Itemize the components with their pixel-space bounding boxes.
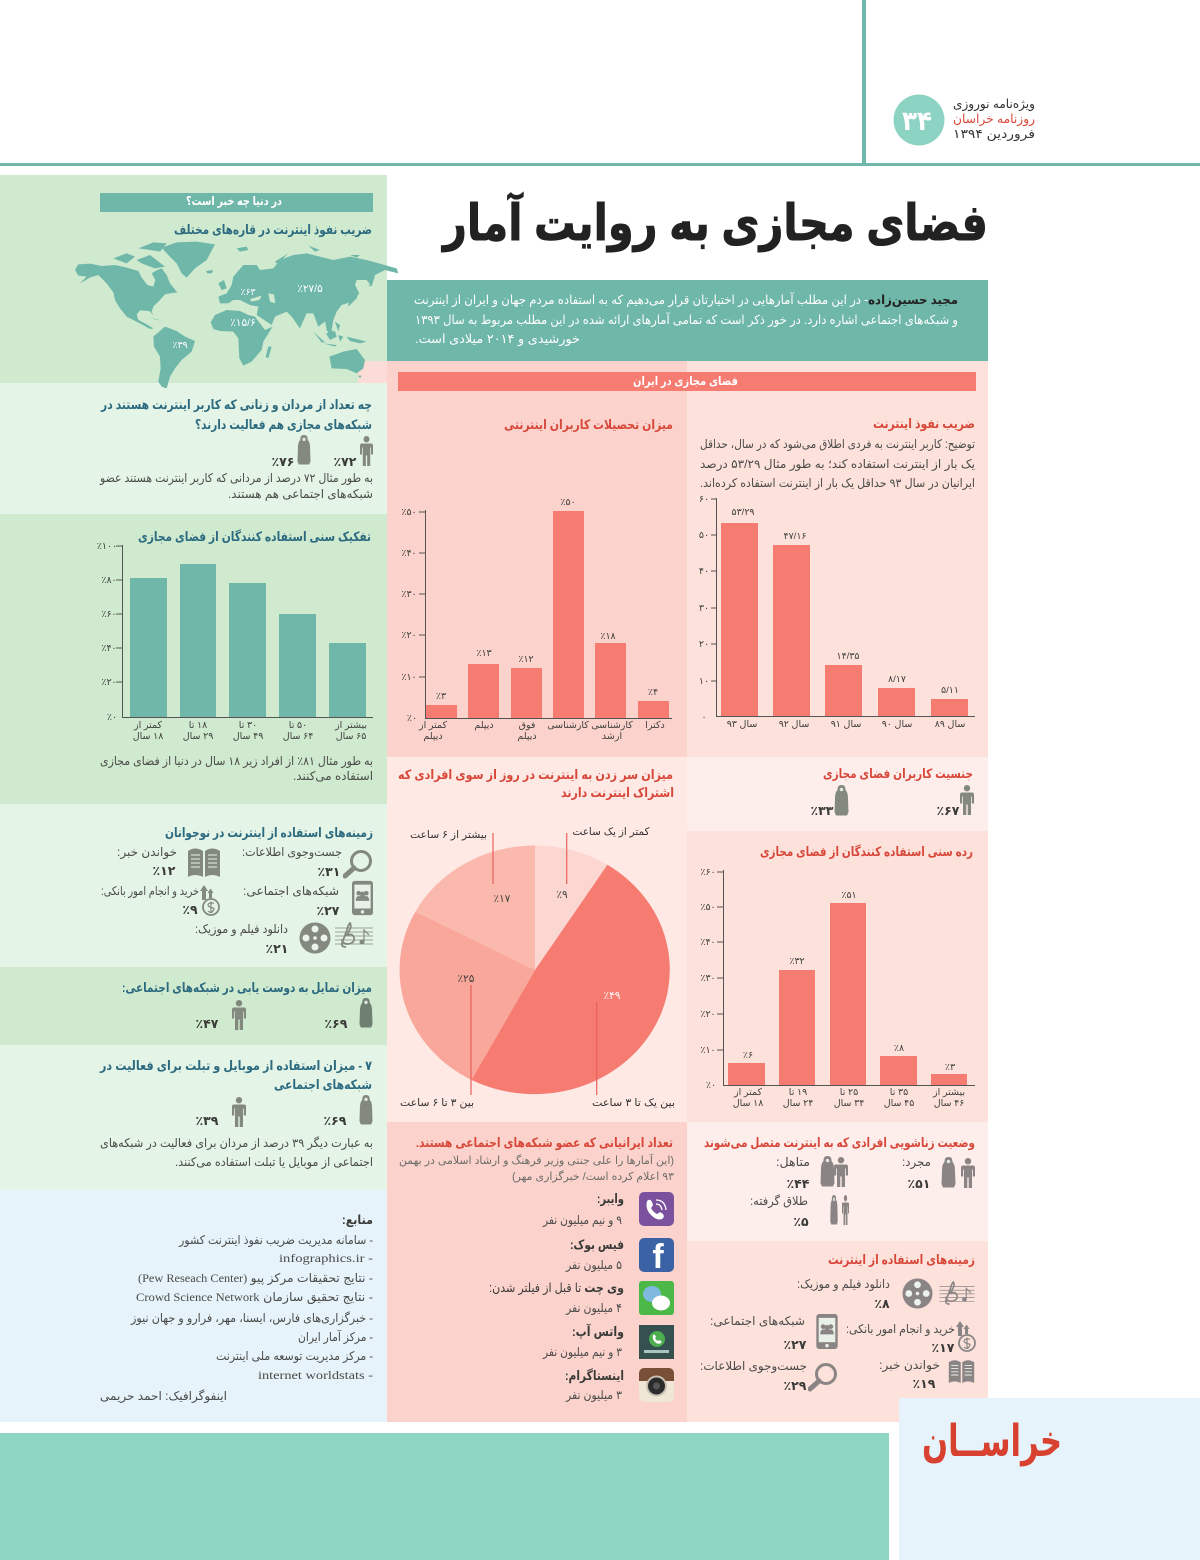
bar chart: age rank: ۴۶ سال	[934, 1098, 964, 1109]
bar chart: penetration by year: ۲۰	[699, 639, 709, 650]
bar chart: age rank: ٪۵۰	[700, 902, 716, 913]
bar chart: age rank: ۱۹ تا	[789, 1087, 807, 1098]
age breakdown note: به طور مثال ۸۱٪ از افراد زیر ۱۸ سال در دنیا از فضای مجازی	[100, 754, 373, 769]
bar chart: education: ارشد	[602, 731, 622, 742]
panel: marital status: ٪۵۱	[908, 1177, 930, 1191]
panel: men and women on social networks: شبکه‌های مجازی هم فعالیت دارند؟	[195, 417, 372, 432]
bar chart: penetration by year: ۶۰	[699, 494, 709, 505]
world map: ٪۶۳	[240, 287, 256, 298]
pie chart: daily use: بین ۳ تا ۶ ساعت	[400, 1097, 474, 1109]
panel: men and women on social networks	[99, 397, 373, 501]
panel: making friends: ٪۶۹	[325, 1017, 348, 1031]
bar chart: age breakdown: ٪۴۰	[101, 643, 117, 654]
wechat row: ۴ میلیون نفر	[565, 1301, 622, 1316]
bar chart: age rank: ٪۳۲	[789, 956, 805, 967]
panel: marital status: ٪۵	[793, 1215, 809, 1229]
bar chart: penetration by year: ۴۰	[699, 566, 709, 577]
bar chart: age breakdown: ٪۱۰۰	[97, 541, 117, 552]
bar chart: penetration by year: ۵۰	[699, 530, 709, 541]
world map: ٪۲۷/۵	[297, 283, 323, 295]
bar chart: education: ٪۳	[436, 691, 446, 702]
panel: internet use areas	[700, 1252, 975, 1393]
top rules	[0, 0, 1200, 166]
instagram row: ۳ میلیون نفر	[565, 1388, 622, 1403]
bar chart: penetration by year: ۴۷/۱۶	[783, 531, 807, 542]
bar chart: age rank: ٪۳۰	[700, 973, 716, 984]
panel: mobile use: اجتماعی از موبایل یا تبلت استفاده می‌کنند.	[175, 1155, 373, 1170]
heading: daily use: اشتراک اینترنت دارند	[561, 785, 674, 800]
bar chart: age rank: ٪۸	[894, 1043, 904, 1054]
title: فضای مجازی به روایت آمار	[441, 192, 988, 253]
instagram row	[565, 1368, 674, 1403]
bar chart: age breakdown: ۱۸ سال	[133, 731, 163, 742]
panel: social network members	[399, 1135, 674, 1183]
heading bar: world: در دنیا چه خبر است؟	[186, 194, 282, 208]
panel: mobile use: به عبارت دیگر ۳۹ درصد از مردان برای فعالیت در شبکه‌های	[100, 1136, 373, 1151]
panel: making friends: ٪۴۷	[196, 1017, 219, 1031]
panel: marital status: مجرد:	[902, 1155, 931, 1170]
facebook row: فیس بوک:	[570, 1237, 624, 1252]
pie chart: daily use: بیشتر از ۶ ساعت	[410, 829, 487, 841]
wechat row	[489, 1281, 674, 1316]
sources: اینفوگرافیک: احمد حریمی	[100, 1389, 227, 1404]
bar chart: age rank: ٪۰	[706, 1080, 716, 1091]
header: issue badge: فروردین ۱۳۹۴	[953, 127, 1035, 142]
bar chart: age breakdown: ٪۲۰	[101, 677, 117, 688]
bar chart: education	[401, 497, 672, 742]
bar chart: age breakdown: بیشتر از	[334, 720, 367, 731]
panel: teen use: زمینه‌های استفاده از اینترنت در نوجوانان	[165, 825, 373, 840]
panel: marital status	[704, 1135, 975, 1229]
bar chart: age breakdown: ۶۵ سال	[336, 731, 366, 742]
intro panel: مجید حسین‌زاده- در این مطلب آمارهایی در اختیارتان قرار می‌دهیم که به استفاده مردم جهان و ایران از اینترنت	[414, 292, 958, 308]
panel: penetration rate	[700, 416, 975, 491]
panel: penetration rate: توضیح: کاربر اینترنت به فردی اطلاق می‌شود که در سال، حداقل	[700, 437, 975, 452]
viber row: ۹ و نیم میلیون نفر	[542, 1213, 622, 1228]
panel: teen use: ٪۹	[182, 903, 198, 917]
panel: men and women on social networks: ٪۷۲	[334, 455, 357, 469]
panel: penetration rate: ایرانیان در سال ۹۳ حداقل یک بار از اینترنت استفاده کرده‌اند.	[700, 476, 975, 491]
bar chart: age breakdown: ۱۸ تا	[189, 720, 207, 731]
sources: - سامانه مدیریت ضریب نفوذ اینترنت کشور	[178, 1233, 373, 1248]
sources: - نتایج تحقیق سازمان Crowd Science Network	[136, 1290, 373, 1305]
panel: internet use areas: ٪۲۹	[784, 1379, 807, 1393]
bar chart: age rank: ٪۳	[945, 1062, 955, 1073]
panel: gender	[811, 766, 974, 818]
sources: - internet worldstats	[258, 1368, 373, 1382]
pie chart: daily use: کمتر از یک ساعت	[572, 826, 650, 838]
panel: marital status: متاهل:	[776, 1155, 810, 1169]
bar chart: education: ٪۳۰	[401, 589, 417, 600]
panel: internet use areas: زمینه‌های استفاده از اینترنت	[828, 1252, 975, 1267]
panel: gender: ٪۳۳	[811, 804, 834, 818]
bar chart: age rank: ۳۵ تا	[890, 1087, 908, 1098]
bar chart: age breakdown: ٪۶۰	[101, 609, 117, 620]
panel: penetration rate: ضریب نفوذ اینترنت	[873, 416, 975, 431]
panel: teen use: ٪۲۷	[317, 904, 340, 918]
bar chart: education: ٪۱۲	[518, 654, 534, 665]
bar chart: age breakdown: ٪۸۰	[101, 575, 117, 586]
sources: - خبرگزاری‌های فارس، ایسنا، مهر، فرارو و جهان نیوز	[130, 1311, 373, 1326]
bar chart: penetration by year: ۰	[701, 712, 707, 723]
bar chart: education: کمتر از	[418, 720, 447, 731]
viber row	[542, 1191, 674, 1228]
header: issue badge	[894, 94, 1035, 146]
heading: daily use: میزان سر زدن به اینترنت در روز از سوی افرادی که	[398, 767, 673, 782]
bar chart: penetration by year: سال ۹۰	[882, 719, 912, 730]
pie chart: daily use: بین یک تا ۳ ساعت	[592, 1097, 675, 1109]
bar chart: age breakdown: ۳۰ تا	[239, 720, 257, 731]
intro panel: خورشیدی و ۲۰۱۴ میلادی است.	[415, 332, 580, 347]
panel: penetration rate: یک بار از اینترنت استفاده کند؛ به طور مثال ۵۳/۲۹ درصد	[700, 457, 975, 472]
pie chart: daily use: ٪۴۹	[604, 990, 621, 1002]
panel: internet use areas: ٪۱۷	[932, 1341, 955, 1355]
bar chart: age rank: ٪۵۱	[841, 890, 857, 901]
bar chart: education: ٪۴۰	[401, 548, 417, 559]
panel: making friends	[122, 980, 373, 1031]
logo: Khorasan: خراســان	[922, 1417, 1062, 1467]
bar chart: age rank: کمتر از	[733, 1087, 762, 1098]
header: issue badge: ویژه‌نامه نوروزی	[953, 97, 1035, 112]
bar chart: age breakdown: ۵۰ تا	[289, 720, 307, 731]
bar chart: age rank	[700, 867, 975, 1109]
panel: teen use: ٪۱۲	[153, 864, 176, 878]
panel: marital status: ٪۴۴	[787, 1177, 810, 1191]
bar chart: education: ٪۱۳	[476, 648, 492, 659]
panel: internet use areas: جست‌وجوی اطلاعات:	[700, 1359, 807, 1374]
panel: teen use: جست‌وجوی اطلاعات:	[242, 845, 342, 860]
panel: teen use: شبکه‌های اجتماعی:	[243, 884, 339, 898]
intro panel	[387, 280, 988, 361]
panel: men and women on social networks: چه تعداد از مردان و زنانی که کاربر اینترنت هستند در	[100, 397, 372, 412]
pie chart: daily use: ٪۹	[556, 889, 568, 901]
whatsapp row: ۳ و نیم میلیون نفر	[542, 1345, 622, 1360]
sources	[100, 1213, 373, 1404]
facebook row: ۵ میلیون نفر	[565, 1258, 622, 1273]
panel: marital status: وضعیت زناشویی افرادی که به اینترنت متصل می‌شوند	[704, 1135, 975, 1150]
intro panel: و شبکه‌های اجتماعی اشاره دارد. در خور ذکر است که تمامی آمارهای ارائه شده در این مطلب مربوط به سال ۱۳۹۳	[415, 312, 958, 328]
bar chart: education: ٪۰	[407, 713, 417, 724]
bar chart: penetration by year: ۸/۱۷	[888, 674, 906, 685]
sources: منابع:	[342, 1213, 373, 1227]
heading: age breakdown: تفکیک سنی استفاده کنندگان از فضای مجازی	[138, 529, 371, 544]
bar chart: education: ٪۱۸	[600, 631, 616, 642]
heading: education: میزان تحصیلات کاربران اینترنتی	[504, 417, 673, 432]
bar chart: penetration by year: ۳۰	[699, 603, 709, 614]
bar chart: penetration by year: ۱۴/۳۵	[836, 651, 860, 662]
bar chart: penetration by year	[699, 494, 975, 730]
panel: teen use: ٪۳۱	[318, 865, 340, 879]
panel: gender: ٪۶۷	[937, 804, 960, 818]
heading bar: Iran: فضای مجازی در ایران	[633, 374, 738, 388]
header: issue badge: ۳۴	[902, 106, 932, 136]
world map	[75, 242, 398, 388]
sources: - نتایج تحقیقات مرکز پیو (Pew Reseach Center)	[138, 1271, 373, 1286]
bar chart: penetration by year: سال ۹۲	[779, 719, 809, 730]
sources: - infographics.ir	[279, 1251, 373, 1265]
panel: teen use: دانلود فیلم و موزیک:	[195, 922, 288, 937]
bar chart: penetration by year: ۱۰	[699, 676, 709, 687]
panel: internet use areas: ٪۱۹	[913, 1377, 936, 1391]
bar chart: age rank: ٪۱۰	[700, 1045, 716, 1056]
panel: mobile use	[99, 1058, 373, 1170]
world map: ٪۱۵/۶	[230, 317, 256, 329]
panel: social network members: (این آمارها را علی جنتی وزیر فرهنگ و ارشاد اسلامی در بهمن	[399, 1153, 674, 1167]
panel: internet use areas: خواندن خبر:	[879, 1358, 940, 1373]
panel: teen use: خواندن خبر:	[117, 845, 177, 860]
bar chart: age breakdown: ۶۴ سال	[283, 731, 313, 742]
sources: - مرکز آمار ایران	[298, 1329, 373, 1345]
bar chart: age rank: ۱۸ سال	[733, 1098, 763, 1109]
panel: men and women on social networks: ٪۷۶	[272, 455, 294, 469]
panel: men and women on social networks: به طور مثال ۷۲ درصد از مردانی که کاربر اینترنت هستند عضو	[99, 471, 373, 486]
heading: daily use	[398, 767, 674, 800]
panel: mobile use: ۷ - میزان استفاده از موبایل و تبلت برای فعالیت در	[99, 1058, 372, 1073]
bar chart: age rank: ۳۴ سال	[834, 1098, 864, 1109]
bar chart: age breakdown: ٪۰	[107, 712, 117, 723]
pie chart: daily use: ٪۱۷	[494, 893, 511, 905]
panel: social network members: تعداد ایرانیانی که عضو شبکه‌های اجتماعی هستند.	[416, 1135, 673, 1150]
bar chart: penetration by year: سال ۹۳	[727, 719, 757, 730]
bar chart: education: دیپلم	[423, 731, 443, 742]
panel: men and women on social networks: شبکه‌های اجتماعی هم هستند.	[228, 487, 373, 501]
heading bar: world	[100, 193, 373, 212]
facebook row: f	[652, 1238, 664, 1276]
bar chart: age rank: ٪۴۰	[700, 937, 716, 948]
bar chart: age rank: ٪۲۰	[700, 1009, 716, 1020]
panel: internet use areas: ٪۲۷	[784, 1338, 807, 1352]
bar chart: age breakdown	[97, 541, 373, 742]
pie chart: daily use: ٪۲۵	[458, 973, 475, 985]
bar chart: penetration by year: ۵/۱۱	[941, 685, 959, 696]
panel: marital status: طلاق گرفته:	[750, 1194, 808, 1209]
heading: continents: ضریب نفوذ اینترنت در قاره‌های مختلف	[174, 222, 372, 237]
bar chart: age rank: بیشتر از	[932, 1087, 965, 1098]
bar chart: education: دکترا	[645, 720, 665, 731]
bar chart: education: ٪۴	[648, 687, 658, 698]
bar chart: education: کارشناسی	[591, 720, 633, 731]
whatsapp row: واتس آپ:	[572, 1323, 624, 1339]
bar chart: penetration by year: ۵۳/۲۹	[731, 507, 755, 518]
bar chart: education: فوق	[519, 720, 535, 731]
panel: teen use	[101, 825, 373, 956]
bar chart: age rank: ۴۵ سال	[884, 1098, 914, 1109]
wechat row: وی چت تا قبل از فیلتر شدن:	[489, 1281, 624, 1296]
panel: internet use areas: ٪۸	[874, 1297, 890, 1311]
panel: mobile use: شبکه‌های اجتماعی	[274, 1077, 372, 1092]
panel: making friends: میزان تمایل به دوست یابی در شبکه‌های اجتماعی:	[122, 980, 372, 995]
panel: social network members: ۹۳ اعلام کرده است/ خبرگزاری مهر)	[512, 1170, 674, 1183]
panel: teen use: ٪۲۱	[266, 942, 288, 956]
bar chart: age rank: ۲۵ تا	[840, 1087, 858, 1098]
panel: internet use areas: خرید و انجام امور بانکی:	[846, 1322, 955, 1337]
facebook row	[565, 1237, 674, 1276]
bar chart: age rank: ٪۶	[743, 1050, 753, 1061]
age breakdown note: استفاده می‌کنند.	[293, 769, 373, 783]
bar chart: age breakdown: ۴۹ سال	[233, 731, 263, 742]
bar chart: education: ٪۵۰	[401, 507, 417, 518]
bar chart: education: دیپلم	[474, 720, 494, 731]
bar chart: education: دیپلم	[517, 731, 537, 742]
bar chart: penetration by year: سال ۸۹	[935, 719, 965, 730]
heading bar: Iran	[398, 372, 976, 391]
bar chart: age breakdown: کمتر از	[133, 720, 162, 731]
world map: ٪۳۹	[172, 340, 188, 351]
pie chart: daily use	[400, 826, 675, 1109]
bar chart: education: ٪۵۰	[560, 497, 576, 508]
panel: mobile use: ٪۶۹	[324, 1114, 347, 1128]
age breakdown note	[100, 754, 373, 783]
viber row: وایبر:	[597, 1191, 624, 1206]
panel: mobile use: ٪۳۹	[196, 1114, 219, 1128]
header: issue badge: روزنامه خراسان	[953, 112, 1035, 127]
bar chart: penetration by year: سال ۹۱	[831, 719, 861, 730]
panel: gender: جنسیت کاربران فضای مجازی	[823, 766, 973, 781]
bar chart: age rank: ۲۴ سال	[783, 1098, 813, 1109]
panel: internet use areas: دانلود فیلم و موزیک:	[797, 1277, 890, 1292]
sources: - مرکز مدیریت توسعه ملی اینترنت	[216, 1349, 373, 1364]
bar chart: age rank: ٪۶۰	[700, 867, 716, 878]
bar chart: education: ٪۲۰	[401, 630, 417, 641]
bar chart: education: ٪۱۰	[401, 672, 417, 683]
panel: internet use areas: شبکه‌های اجتماعی:	[710, 1314, 805, 1328]
bar chart: education: کارشناسی	[547, 720, 589, 731]
instagram row: اینستاگرام:	[565, 1368, 624, 1384]
whatsapp row	[542, 1323, 674, 1360]
panel: teen use: خرید و انجام امور بانکی:	[101, 884, 199, 899]
heading: age rank: رده سنی استفاده کنندگان از فضای مجازی	[760, 844, 973, 859]
bar chart: age breakdown: ۲۹ سال	[183, 731, 213, 742]
